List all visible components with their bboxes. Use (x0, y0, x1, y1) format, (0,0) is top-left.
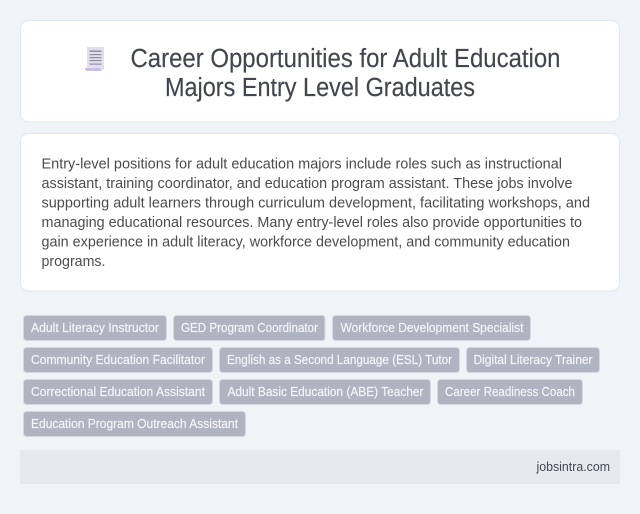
footer (20, 450, 620, 484)
tag: Workforce Development Specialist: Workforce Development Specialist (340, 321, 524, 335)
tag: Career Readiness Coach (438, 380, 582, 404)
tag: Correctional Education Assistant (24, 380, 212, 404)
text block: description: gain experience in adult literacy, workforce development, and community education (42, 233, 570, 250)
tag: Correctional Education Assistant: Correctional Education Assistant (31, 385, 205, 399)
tag: ESL Tutor (220, 348, 460, 372)
tag: ESL Tutor: English as a Second Language (ESL) Tutor (227, 353, 452, 367)
tag: ABE Teacher (220, 380, 430, 404)
text block: description (42, 155, 590, 270)
tag: Digital Literacy Trainer (466, 348, 600, 372)
tag: Community Education Facilitator: Community Education Facilitator (31, 353, 205, 367)
tag: Education Program Outreach Assistant: Education Program Outreach Assistant (31, 417, 239, 431)
tag: GED Program Coordinator: GED Program Coordinator (181, 321, 318, 335)
tag: Community Education Facilitator (24, 348, 212, 372)
tag: Education Program Outreach Assistant (24, 412, 246, 436)
tag list: job titles (24, 316, 600, 436)
text block: description: supporting adult learners through curriculum development, facilitating workshops, and (42, 194, 590, 211)
tag: Adult Literacy Instructor (24, 316, 166, 340)
text block: description: programs. (42, 253, 106, 270)
panel: description (20, 134, 620, 291)
title: Majors Entry Level Graduates (165, 74, 475, 102)
text block: description: managing educational resources. Many entry-level roles also provide opportunities to (42, 214, 582, 231)
text block: description: assistant, training coordinator, and education program assistant. These jobs involve (42, 175, 572, 192)
text block: description: Entry-level positions for adult education majors include roles such as instructional (42, 155, 562, 172)
title (130, 45, 560, 102)
icon: document scroll (85, 47, 104, 71)
tag: ABE Teacher: Adult Basic Education (ABE) Teacher (228, 385, 424, 399)
tag: Workforce Development Specialist (332, 316, 530, 340)
panel: title card (20, 20, 620, 122)
tag: Adult Literacy Instructor: Adult Literacy Instructor (31, 321, 159, 335)
footer: source: jobsintra.com (536, 460, 610, 474)
tag: Career Readiness Coach: Career Readiness Coach (445, 385, 575, 399)
tag: GED Program Coordinator (174, 316, 325, 340)
tag: Digital Literacy Trainer: Digital Literacy Trainer (474, 353, 592, 367)
title: Career Opportunities for Adult Education (130, 45, 560, 73)
